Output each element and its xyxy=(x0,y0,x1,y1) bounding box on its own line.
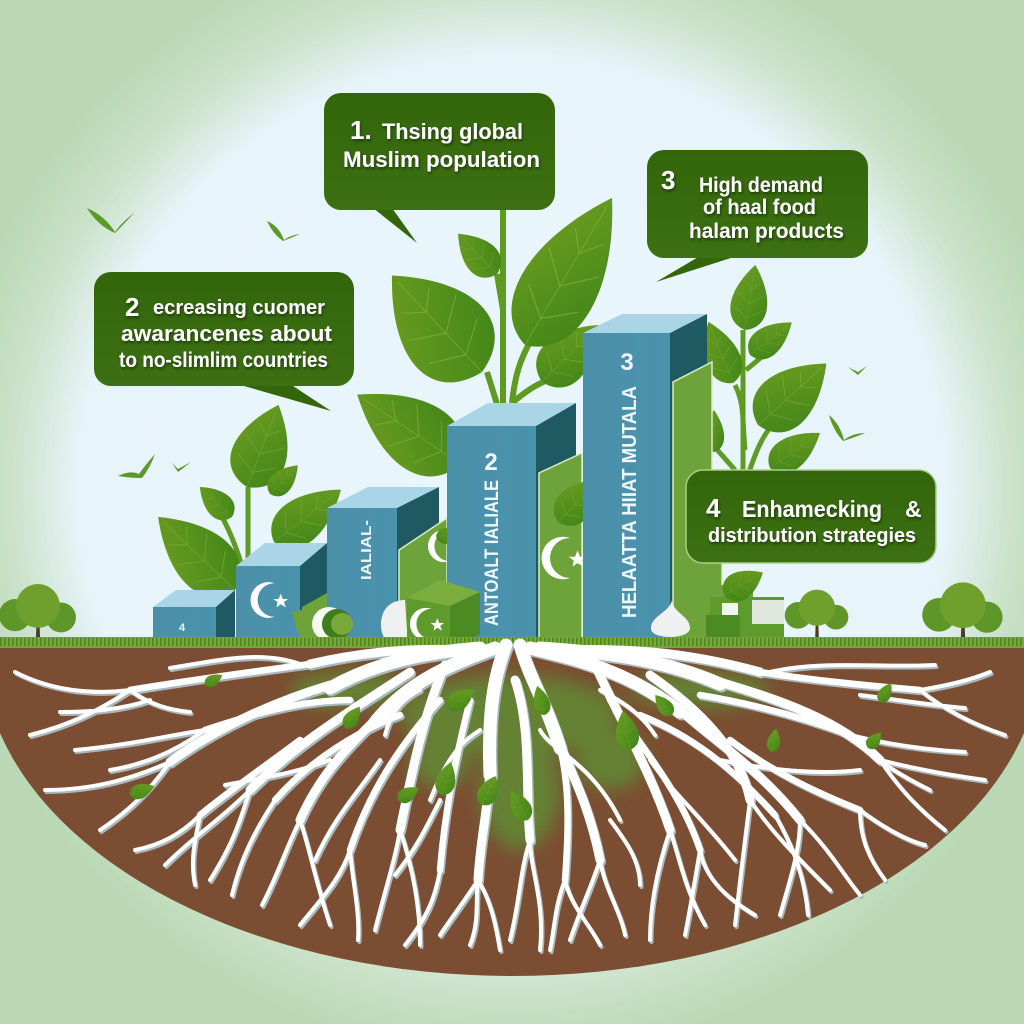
product cluster xyxy=(693,560,784,639)
soil mound xyxy=(0,648,1024,976)
callout 2: consumer awareness xyxy=(94,272,354,411)
bar 5: HELAATTA HIIAT MUTALA xyxy=(619,386,641,618)
moss patches xyxy=(290,672,770,850)
callout 4: marketing and distribution: 4 xyxy=(706,493,721,523)
bar 5: 3 xyxy=(620,349,634,376)
garlic right xyxy=(651,600,690,637)
callout 4: marketing and distribution xyxy=(686,470,936,563)
callout 1: rising Muslim population: Thsing global xyxy=(382,119,523,144)
callout 3: high demand: 3 xyxy=(661,165,675,195)
bar 1 xyxy=(153,590,235,637)
callout 4: marketing and distribution: & xyxy=(905,496,922,522)
bar 4: 2 xyxy=(484,449,498,476)
bar 3 xyxy=(327,487,466,640)
bird-like leaves xyxy=(87,208,867,478)
callout 3: high demand: halam products xyxy=(689,220,844,243)
callout 2: consumer awareness: to no-slimlim countries xyxy=(119,349,328,372)
callout 4: marketing and distribution: Enhamecking xyxy=(742,496,882,522)
grass strip xyxy=(0,637,1024,648)
bar 5 xyxy=(583,314,722,640)
callout 1: rising Muslim population: Muslim population xyxy=(343,147,540,172)
tree right small xyxy=(785,590,848,640)
bar 3: IALIAL- xyxy=(358,520,375,580)
callout 1: rising Muslim population xyxy=(324,93,555,243)
bar 4: ANTOALT IALIALE xyxy=(482,480,503,626)
round green product xyxy=(292,607,353,641)
white root network xyxy=(15,645,1006,952)
callout 3: high demand xyxy=(647,150,868,282)
bar 1: 4 xyxy=(179,622,186,634)
callout 3: high demand: of haal food xyxy=(703,196,816,219)
callout 4: marketing and distribution: distribution strategies xyxy=(708,525,916,547)
tree left xyxy=(0,584,76,645)
green box xyxy=(407,580,480,652)
right plant xyxy=(692,262,845,481)
soil leaves xyxy=(128,670,897,825)
callout 2: consumer awareness: ecreasing cuomer xyxy=(153,297,325,319)
central plant xyxy=(338,178,645,493)
bar 2 xyxy=(236,543,327,640)
callout 2: consumer awareness: awarancenes about xyxy=(121,321,333,346)
bar 4 xyxy=(447,403,613,640)
callout 3: high demand: High demand xyxy=(699,174,823,197)
tree right large xyxy=(922,582,1003,646)
callout 1: rising Muslim population: 1. xyxy=(350,115,372,145)
garlic left xyxy=(381,600,408,647)
left plant xyxy=(138,395,355,611)
callout 2: consumer awareness: 2 xyxy=(125,292,139,322)
